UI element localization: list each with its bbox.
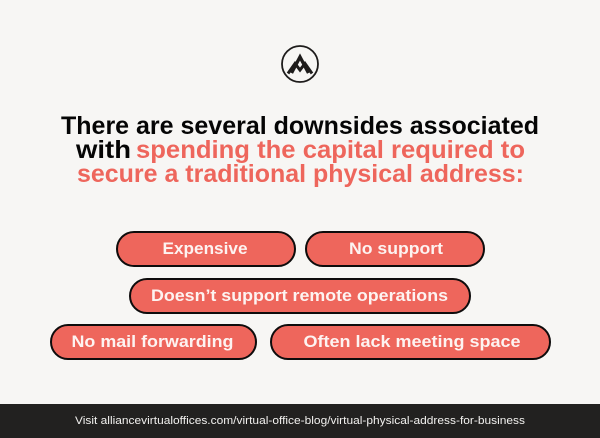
pill: Expensive: Expensive: [162, 239, 248, 258]
pill: Doesn't support remote operations: [130, 279, 470, 313]
title: spending the capital required to: [136, 136, 525, 164]
pill: Often lack meeting space: Often lack meeting space: [304, 332, 520, 351]
pill: Expensive: [117, 232, 295, 266]
pill: Doesn't support remote operations: Doesn’t support remote operations: [151, 286, 448, 305]
pill: No support: [306, 232, 484, 266]
pill: No mail forwarding: No mail forwarding: [72, 332, 234, 351]
icon: logo: [282, 46, 318, 82]
footer bar: [0, 404, 600, 438]
title: secure a traditional physical address:: [77, 160, 524, 188]
pill: Often lack meeting space: [271, 325, 550, 359]
footer bar: Visit alliancevirtualoffices.com/virtual-office-blog/virtual-physical-address-for-business: [75, 415, 526, 427]
title: [61, 112, 539, 188]
title: There are several downsides associated: [61, 112, 539, 140]
pill: No support: No support: [349, 239, 443, 258]
pill: No mail forwarding: [51, 325, 256, 359]
title: with: [75, 136, 131, 164]
